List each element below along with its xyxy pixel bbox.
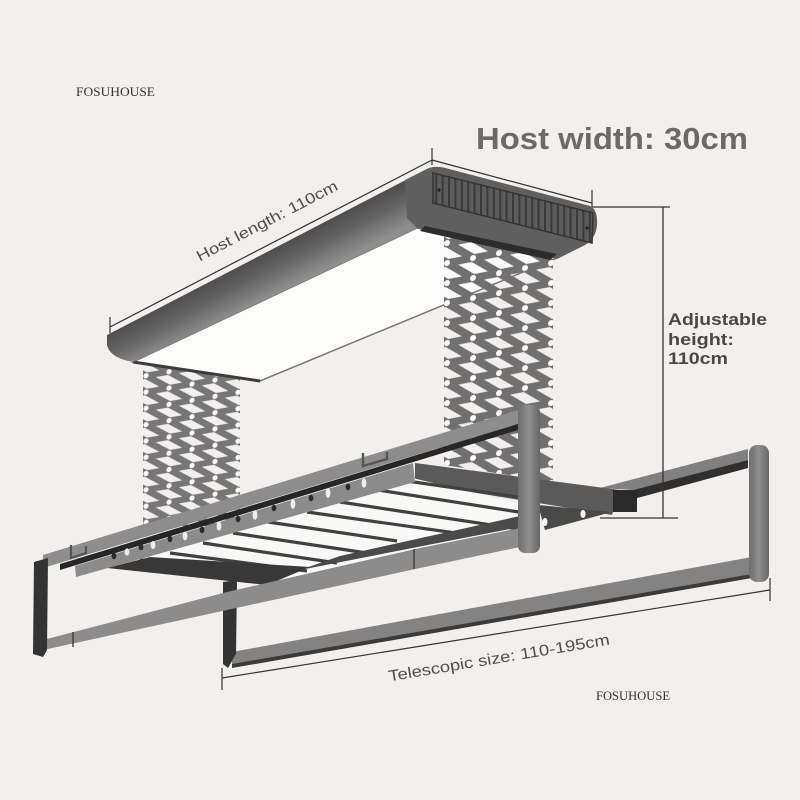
rail joint <box>73 549 414 647</box>
left clip <box>71 545 86 558</box>
adjustable height label: Adjustable <box>668 310 767 329</box>
host end cap <box>405 167 597 259</box>
strip holes <box>112 478 366 559</box>
host length dimension line <box>110 148 432 333</box>
perforated strip <box>75 463 415 577</box>
left scissor lift <box>143 366 240 526</box>
vent grille <box>433 173 593 243</box>
back upper bar shadow <box>630 460 748 500</box>
back lower rail shadow <box>232 574 752 668</box>
heading: host width: Host width: 30cm <box>476 121 748 156</box>
screw left <box>437 188 441 192</box>
back right post <box>749 445 769 582</box>
host side bar <box>107 167 597 362</box>
back rack beam <box>415 463 637 530</box>
rack underside right of post <box>538 505 612 530</box>
front lower telescopic rail <box>43 528 520 650</box>
slat background <box>105 475 525 585</box>
brand label bottom: FOSUHOUSE <box>596 689 670 703</box>
height dimension line <box>592 207 678 518</box>
dark near rack edge <box>300 516 520 570</box>
front right post <box>518 405 540 553</box>
back left post <box>223 580 237 668</box>
host width dimension line <box>432 160 592 207</box>
front top rail shadow <box>60 424 518 570</box>
slats <box>140 480 525 578</box>
screw right <box>585 226 589 230</box>
front frame of drying rack <box>33 405 540 657</box>
front left post <box>33 558 48 657</box>
adjustable height label: 110cm <box>668 349 728 368</box>
front top rail <box>43 410 518 568</box>
light panel underside <box>133 228 557 381</box>
brand label top: FOSUHOUSE <box>76 85 155 99</box>
right clip <box>363 452 387 466</box>
back lower telescopic rail <box>232 557 752 667</box>
end shadow <box>420 226 557 260</box>
right scissor lift <box>444 232 553 482</box>
back upper bar <box>600 449 748 490</box>
adjustable height label <box>668 310 767 368</box>
host length label: Host length: 110cm <box>194 178 341 265</box>
host unit <box>107 167 597 381</box>
rack with slats <box>105 475 525 585</box>
roller left <box>542 518 548 526</box>
telescopic size label: Telescopic size: 110-195cm <box>387 632 611 685</box>
dark rack cross beam <box>107 557 310 585</box>
telescopic dimension line <box>222 578 770 690</box>
panel lower dark edge <box>133 362 260 381</box>
adjustable height label: height: <box>668 330 734 349</box>
motor box <box>613 490 637 512</box>
roller right <box>580 510 586 518</box>
back frame of drying rack <box>223 445 769 668</box>
